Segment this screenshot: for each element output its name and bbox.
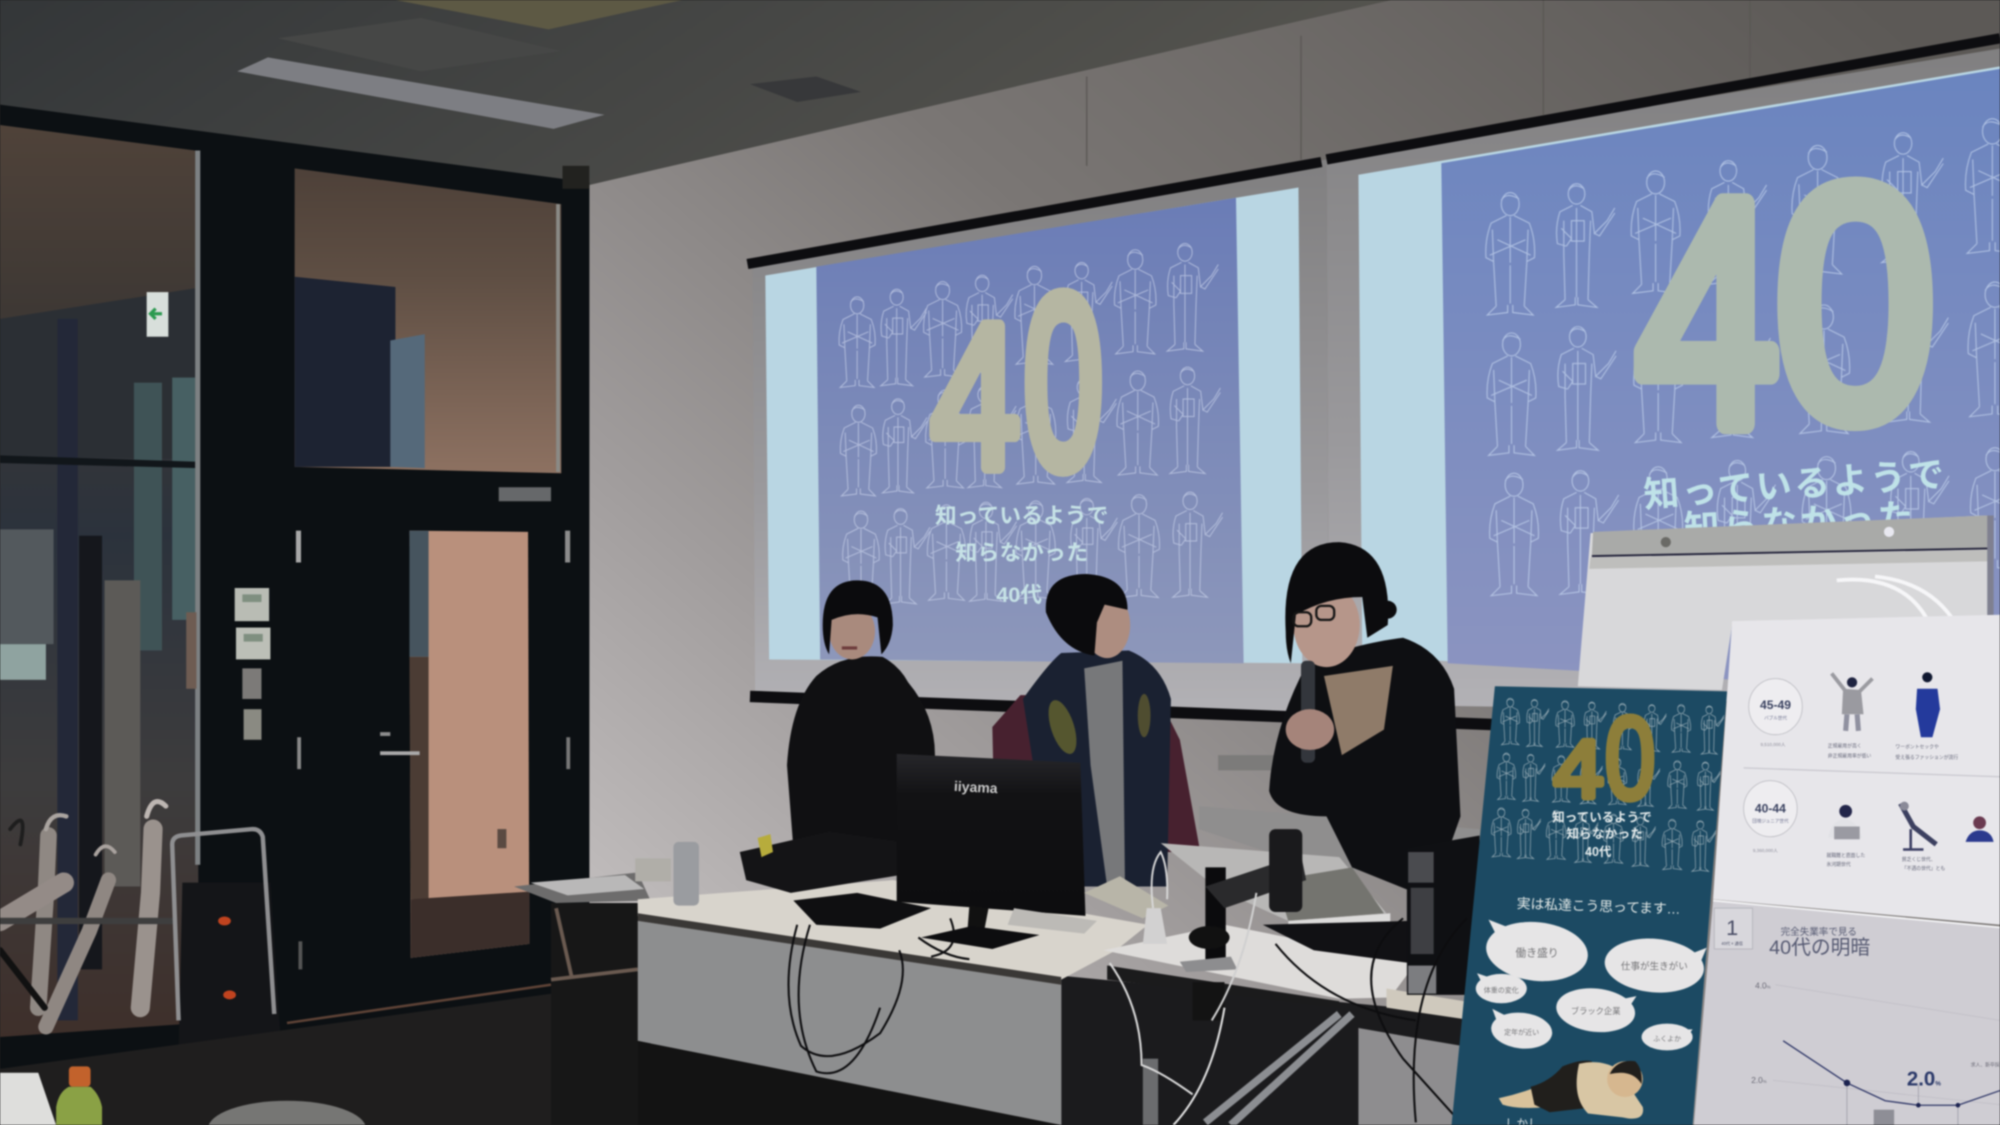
umbrellas <box>0 802 172 1027</box>
caption: 貧乏くじ世代、 <box>1902 856 1936 863</box>
door hardware and wall controls <box>235 166 589 969</box>
slide title left: 知らなかった <box>955 540 1088 565</box>
sticky notes <box>758 834 773 857</box>
unemployment line chart: 2.0% <box>1907 1068 1941 1090</box>
tablet display on arm <box>1161 829 1409 972</box>
caption: 正規雇用が高く <box>1828 742 1862 749</box>
dark area under desks <box>1061 976 1467 1125</box>
whiteboard <box>1578 515 1994 690</box>
speech bubble <box>1483 917 1591 986</box>
counter behind presenters <box>1199 755 1480 880</box>
cables <box>788 893 1467 1125</box>
screen 2 fabric <box>1327 48 2000 708</box>
large 40 numeral right slide <box>1636 120 1935 492</box>
dark door frame wall <box>0 105 589 1069</box>
slide title right: 知らなかった <box>1683 497 1915 549</box>
slide title left: 40代 <box>996 582 1042 607</box>
section number box <box>1714 908 1753 949</box>
speech bubble <box>1642 1024 1693 1050</box>
left glass window <box>0 125 200 1037</box>
green tea bottle <box>56 1066 102 1125</box>
floor reflection line <box>287 985 551 1023</box>
speech bubble: ブラック企業 <box>1571 1006 1621 1016</box>
caption <box>1828 742 1958 761</box>
generation 45-49 badge <box>1749 679 1802 747</box>
hand truck dolly <box>172 829 281 1052</box>
unemployment line chart <box>1751 981 2000 1125</box>
speech bubble: 定年が近い <box>1504 1027 1539 1036</box>
left desk with front panel <box>638 880 1148 1125</box>
desk figure <box>1966 816 1994 842</box>
speech bubble: 体重の変化 <box>1484 985 1519 994</box>
black tray <box>740 832 901 893</box>
section number box: 1 <box>1726 915 1738 940</box>
line-art men on left slide <box>839 243 1223 604</box>
speech bubble <box>1602 935 1707 997</box>
large 40 numeral right slide: 0 <box>1776 120 1935 488</box>
blue suit figure <box>1916 672 1940 737</box>
white infographic poster <box>1694 615 2000 1125</box>
unemployment line chart: 2.0% <box>1751 1075 1767 1085</box>
exit sign <box>147 292 168 337</box>
poster title: 知らなかった <box>1566 826 1643 841</box>
poster title: 40代 <box>1585 845 1612 859</box>
generation 40-44 badge: 9,360,000人 <box>1753 848 1778 853</box>
speech bubble: 働き盛り <box>1515 946 1559 960</box>
screen roller bars <box>747 38 2000 724</box>
PC tower <box>1407 835 1480 995</box>
large 40 numeral poster: 0 <box>1605 694 1656 824</box>
caption <box>1827 852 1945 872</box>
screen 1 fabric <box>753 159 1329 714</box>
side metal table <box>514 872 651 1125</box>
small white device <box>635 842 699 906</box>
speech bubble <box>1554 985 1637 1036</box>
line-art men on poster <box>1491 698 1724 871</box>
line-art men on right slide <box>1486 119 2000 596</box>
office chair figure <box>1900 802 1936 849</box>
right desk <box>1103 925 1464 1125</box>
generation 40-44 badge: 40-44 <box>1755 801 1786 815</box>
floor <box>0 982 651 1125</box>
monitor <box>897 754 1085 949</box>
caption: ワーボントセックや <box>1895 744 1939 751</box>
section heading <box>1769 926 1870 959</box>
large 40 numeral poster <box>1554 694 1656 824</box>
reclining man illustration <box>1499 1061 1643 1125</box>
blue poster <box>1452 686 1727 1125</box>
presenter 1 <box>787 580 935 848</box>
large 40 numeral left slide: 4 <box>931 282 1020 510</box>
slide title right: 知っているようで <box>1642 454 1945 515</box>
slide title right <box>1642 454 1945 549</box>
speech bubble <box>1489 1009 1554 1052</box>
ceiling <box>0 0 1390 185</box>
AV box <box>793 893 931 929</box>
speech bubble: ふくよか <box>1653 1035 1681 1043</box>
caption: 受え張るファッションが流行 <box>1895 754 1958 761</box>
generation 45-49 badge: バブル世代 <box>1764 714 1787 721</box>
large 40 numeral right slide: 4 <box>1636 136 1778 492</box>
generation 45-49 badge: 9,510,000人 <box>1760 742 1786 747</box>
wall seams <box>1087 0 1750 166</box>
slide title left <box>935 503 1108 607</box>
projected slide left <box>765 187 1302 663</box>
papers on desk <box>1008 876 1168 934</box>
wall <box>589 0 2000 1125</box>
large 40 numeral poster: 4 <box>1554 724 1604 815</box>
generation 40-44 badge: 団塊ジュニア世代 <box>1752 818 1789 825</box>
presenter 2 <box>992 574 1200 886</box>
unemployment line chart: 4.0% <box>1755 981 1771 991</box>
caption: 非正規雇用率が低い <box>1828 753 1871 760</box>
caption: 就職難と直面した <box>1827 852 1865 859</box>
caption: 「不遇の世代」とも <box>1902 865 1945 872</box>
generation 40-44 badge <box>1744 781 1797 853</box>
section number box: 40代 × 通信 <box>1721 940 1743 946</box>
audience head <box>208 1101 366 1125</box>
presenter 3 <box>1269 542 1460 899</box>
slide title left: 知っているようで <box>935 503 1108 528</box>
poster subheading: 実は私達こう思ってます… <box>1516 896 1681 917</box>
microphone <box>1143 852 1167 944</box>
speech bubble <box>1476 973 1527 1003</box>
large 40 numeral left slide <box>931 247 1102 517</box>
caption: 氷河期世代 <box>1827 861 1851 868</box>
door window <box>409 531 529 958</box>
monitor: iiyama <box>954 778 998 796</box>
upper glass transom <box>295 168 561 473</box>
large 40 numeral left slide: 0 <box>1024 247 1102 517</box>
speech bubble: 仕事が生きがい <box>1621 960 1688 972</box>
section heading: 40代の明暗 <box>1769 937 1870 959</box>
grey suit figure <box>1832 673 1872 731</box>
section heading: 完全失業率で見る <box>1781 926 1857 938</box>
laptop figure <box>1828 805 1862 839</box>
white box bottom left <box>0 1073 56 1125</box>
poster title <box>1552 809 1652 859</box>
projected slide right <box>1358 66 2000 695</box>
poster title: 知っているようで <box>1552 809 1652 824</box>
generation 45-49 badge: 45-49 <box>1760 698 1791 712</box>
